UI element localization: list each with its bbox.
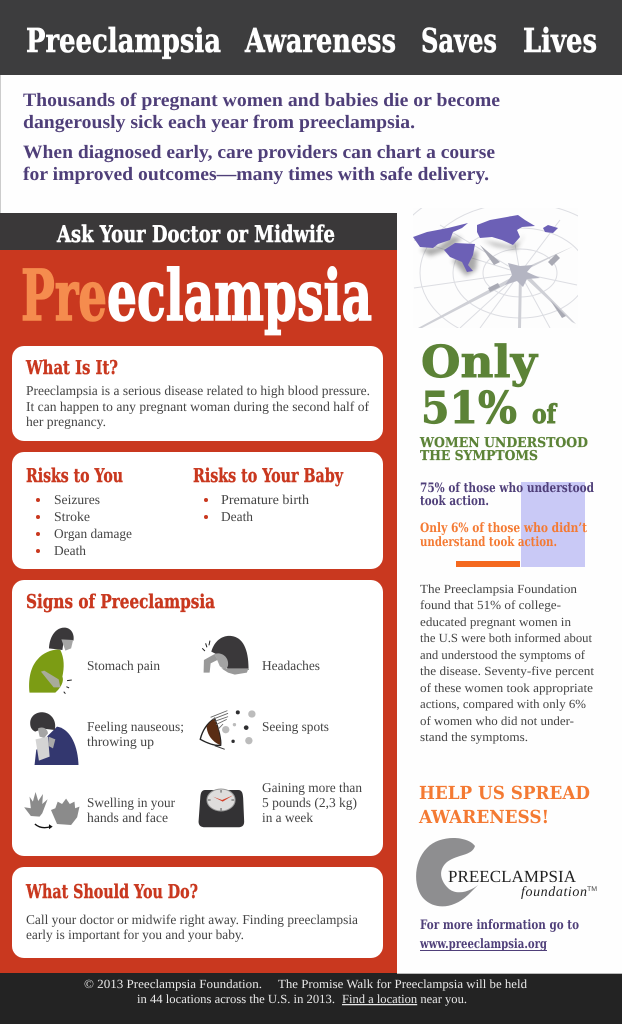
footer: in 44 locations across the U.S. in 2013. <box>137 992 335 1006</box>
label: seeing spots: Seeing spots <box>262 719 329 734</box>
label: swelling: Swelling in your <box>87 795 175 810</box>
title banner: Preeclampsia <box>26 21 221 60</box>
big title: Preeclampsia: eclampsia <box>107 254 372 337</box>
text block: foundation finding <box>420 582 595 744</box>
card: risks: Risks to You <box>26 465 123 487</box>
card: risks: Organ damage <box>54 526 132 541</box>
big title: Preeclampsia <box>21 254 372 337</box>
title banner <box>0 0 622 75</box>
label: feeling nauseous <box>87 719 184 749</box>
intro text <box>23 90 500 185</box>
card: what is it <box>12 346 383 441</box>
card: risks: Risks to Your Baby <box>193 465 344 487</box>
call to action: HELP US SPREAD <box>419 783 590 804</box>
stat: only 51 percent: THE SYMPTOMS <box>420 448 538 464</box>
label: weight gain: in a week <box>262 810 313 825</box>
label: weight gain <box>262 780 362 825</box>
card: what is it: her pregnancy. <box>26 414 106 429</box>
text block: foundation finding: the U.S were both informed about <box>420 631 593 645</box>
intro text: for improved outcomes—many times with safe delivery. <box>23 164 489 185</box>
icon: headache <box>202 636 249 675</box>
more information link <box>419 918 579 952</box>
logo: preeclampsia foundation <box>416 838 597 906</box>
title banner: Lives <box>523 21 597 60</box>
title banner: Saves <box>421 21 497 60</box>
chart bars <box>456 482 585 567</box>
footer <box>0 973 622 1024</box>
card: risks: Stroke <box>54 509 90 524</box>
card: risks: Seizures <box>54 492 100 507</box>
stat: 6 percent took action: understand took action. <box>420 535 557 550</box>
label: weight gain: Gaining more than <box>262 780 362 795</box>
card: what is it: It can happen to any pregnant woman during the second half of <box>26 399 370 414</box>
label: feeling nauseous: Feeling nauseous; <box>87 719 184 734</box>
intro text: dangerously sick each year from preeclampsia. <box>23 112 415 133</box>
stat: 6 percent took action: Only 6% of those who didn’t <box>420 521 587 536</box>
stat: 6 percent took action <box>420 521 587 550</box>
stat: only 51 percent: 51% <box>421 383 517 434</box>
title banner: Awareness <box>244 21 396 60</box>
more information link: For more information go to <box>420 918 579 933</box>
card: risks: Death <box>221 509 253 524</box>
card: risks <box>12 452 383 569</box>
big title: Preeclampsia: Pre <box>21 254 107 337</box>
stat: only 51 percent: Only <box>421 337 538 388</box>
icon: stomach pain <box>29 628 74 694</box>
card: risks: Death <box>54 543 86 558</box>
stat: only 51 percent: of <box>532 400 558 430</box>
text block: foundation finding: educated pregnant women in <box>420 615 572 629</box>
panel: ask your doctor <box>0 213 397 974</box>
card: what should you do: early is important for you and your baby. <box>26 927 244 942</box>
icon: scale <box>199 789 244 827</box>
card: what is it: Preeclampsia is a serious disease related to high blood pressure. <box>26 383 370 398</box>
text block: foundation finding: and understood the symptoms of <box>420 648 586 662</box>
icon: swollen hands <box>24 792 79 829</box>
stat: only 51 percent: WOMEN UNDERSTOOD <box>419 435 588 451</box>
card: risks: Premature birth <box>221 492 309 507</box>
intro text: Thousands of pregnant women and babies die or become <box>23 90 500 111</box>
text block: foundation finding: the disease. Seventy-five percent <box>420 664 595 678</box>
call to action <box>418 783 590 828</box>
card: signs of preeclampsia: Signs of Preeclampsia <box>26 591 215 613</box>
card: signs of preeclampsia <box>12 580 383 856</box>
text block: foundation finding: The Preeclampsia Foundation <box>420 582 578 596</box>
intro text: When diagnosed early, care providers can chart a course <box>23 142 495 163</box>
logo: preeclampsia foundation: foundation <box>521 885 587 900</box>
map compass image <box>413 208 578 328</box>
card: what should you do <box>12 867 383 958</box>
more information link: www.preeclampsia.org <box>419 937 547 952</box>
stat: only 51 percent <box>419 337 588 464</box>
label: weight gain: 5 pounds (2,3 kg) <box>262 795 357 810</box>
label: stomach pain: Stomach pain <box>87 658 160 673</box>
card: what should you do: What Should You Do? <box>25 881 198 903</box>
icon: seeing spots <box>200 710 256 749</box>
stat: 75 percent took action <box>420 481 594 509</box>
call to action: AWARENESS! <box>418 807 549 828</box>
text block: foundation finding: stand the symptoms. <box>420 730 528 744</box>
footer: Find a location near you. <box>342 992 467 1006</box>
footer: © 2013 Preeclampsia Foundation. <box>84 977 262 991</box>
label: swelling: hands and face <box>87 810 168 825</box>
text block: foundation finding: of these women took appropriate <box>420 681 593 695</box>
label: feeling nauseous: throwing up <box>87 734 154 749</box>
text block: foundation finding: found that 51% of college- <box>420 598 561 612</box>
stat: 75 percent took action: took action. <box>420 494 489 509</box>
label: swelling <box>87 795 175 825</box>
footer: The Promise Walk for Preeclampsia will be held <box>278 977 528 991</box>
subheading: ask your doctor or midwife: Ask Your Doctor or Midwife <box>56 221 335 248</box>
logo: preeclampsia foundation: PREECLAMPSIA <box>448 867 577 886</box>
card: what should you do: Call your doctor or midwife right away. Finding preeclampsia <box>26 912 358 927</box>
logo: preeclampsia foundation: TM <box>587 886 597 893</box>
card: what is it: What Is It? <box>25 357 118 379</box>
text block: foundation finding: actions, compared with only 6% <box>420 697 586 711</box>
icon: nausea <box>30 712 78 765</box>
text block: foundation finding: of women who did not under- <box>420 714 574 728</box>
label: headaches: Headaches <box>262 658 320 673</box>
